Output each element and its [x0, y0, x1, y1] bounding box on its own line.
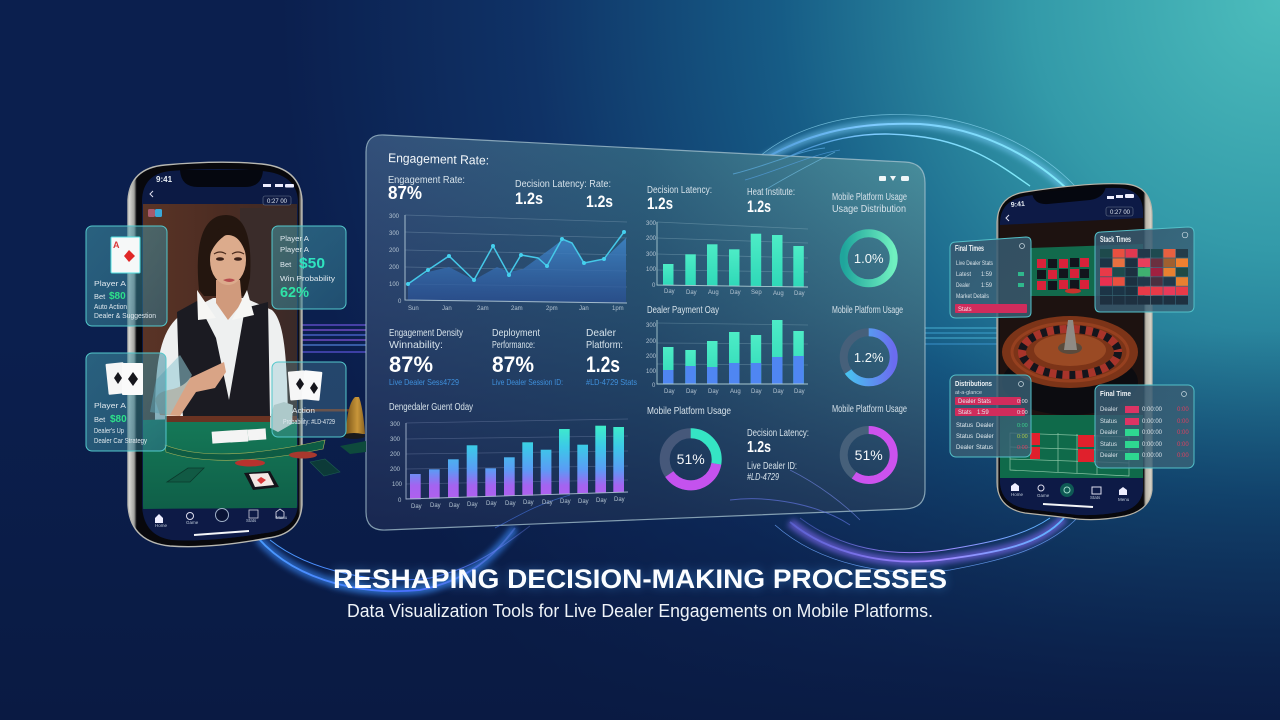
KPI: heat institute — [747, 187, 795, 216]
neon data streaks right — [925, 328, 998, 344]
floating table: final times 1: Market Details — [956, 294, 989, 300]
gradient bar chart: Day — [578, 499, 589, 505]
floating table: final times 3: 0:00:00 — [1142, 419, 1163, 425]
floating card: player A lower left: Bet — [94, 415, 106, 424]
KPI: decision latency 2 — [647, 185, 712, 213]
floating card: win probability: Player A — [280, 245, 309, 254]
floating table: final times 3 — [1095, 385, 1194, 468]
nav bar: Stats — [1090, 495, 1101, 500]
bar chart: latency: 300 — [646, 221, 657, 227]
line chart: engagement: 200 — [389, 265, 400, 271]
KPI: deployment performance: Live Dealer Session ID: — [492, 377, 563, 387]
floating table: distribution: at-a-glance — [955, 390, 982, 396]
bar chart: latency: Day — [664, 289, 675, 295]
line chart: engagement: 200 — [389, 248, 400, 254]
floating table: final times 1: Stats — [958, 307, 972, 313]
donut heading: mobile usage: Mobile Platform Usage — [832, 192, 907, 203]
bar chart: latency: 300 — [646, 252, 657, 258]
floating table: distribution: 0:00 — [1017, 434, 1028, 440]
KPI: deployment performance: Deployment — [492, 328, 540, 339]
line chart: engagement: Jan — [579, 306, 589, 312]
screen — [1000, 188, 1143, 515]
floating card: win probability: Player A — [280, 234, 309, 243]
line chart: engagement: 300 — [389, 231, 400, 237]
dealer figure — [150, 215, 288, 420]
floating card: cards and stats — [272, 362, 346, 437]
floating card: player A lower left: Player A — [94, 401, 126, 410]
KPI: engagement density: Engagement Density — [389, 328, 463, 339]
donut: 1.0%: 1.0% — [854, 251, 884, 266]
bar chart: latency — [646, 221, 808, 297]
left phone: blackjack — [128, 162, 325, 547]
floating table: distribution: 0:00 — [1017, 423, 1028, 429]
floating card: player A top left — [86, 226, 167, 326]
line chart: engagement: 2am — [511, 306, 523, 312]
KPI: engagement rate — [388, 175, 465, 203]
donut heading: platform usage 4: Mobile Platform Usage — [832, 404, 907, 415]
floating table: distribution: 1:59 — [977, 410, 989, 416]
floating table: distribution — [950, 375, 1031, 457]
KPI: engagement density: Winnability: — [389, 340, 443, 351]
floating card: player A top left: Player A — [94, 279, 126, 288]
gradient bar chart: Day — [560, 499, 571, 505]
panel heading: Engagement Rate: — [388, 151, 489, 168]
floating table: final times 3: 0:00:00 — [1142, 407, 1163, 413]
nav bar: Home — [1011, 492, 1024, 497]
gradient bar chart: Day — [486, 501, 497, 507]
stacked bar chart: Day — [773, 389, 784, 395]
gradient bar chart: 100 — [392, 482, 403, 488]
nav bar: Game — [186, 520, 199, 525]
floating table: final times 3: Status — [1100, 419, 1117, 425]
floating table: distribution: Dealer — [976, 434, 994, 440]
back arrow and chip — [150, 191, 291, 205]
status bar — [156, 175, 294, 188]
stacked bar chart: 200 — [646, 354, 657, 360]
backdrop window — [240, 208, 297, 308]
floating table: final times 3: Status — [1100, 442, 1117, 448]
floating card: win probability — [272, 226, 346, 309]
phone frame — [128, 162, 302, 547]
floating table: final times 3: Final Time — [1100, 389, 1131, 398]
chart heading: dealer event: Dengedaler Guent Oday — [389, 402, 473, 413]
main title: RESHAPING DECISION-MAKING PROCESSES — [333, 564, 947, 594]
mini badges — [148, 209, 162, 217]
bar chart: latency: 100 — [646, 267, 657, 273]
stacked bar chart: 300 — [646, 323, 657, 329]
stacked bar chart: 100 — [646, 369, 657, 375]
KPI: deployment performance: Performance: — [492, 340, 535, 351]
floating table: final times 3: 0:00 — [1177, 453, 1189, 459]
nav bar: Game — [1037, 493, 1050, 498]
notch — [1032, 186, 1106, 204]
floating table: final times 1: 1:59 — [981, 283, 993, 289]
donut: 1.0% — [844, 233, 894, 283]
KPI: dealer platform: Dealer — [586, 328, 617, 339]
main title: RESHAPING DECISION-MAKING PROCESSES — [333, 564, 947, 594]
gradient bar chart: Day — [542, 500, 553, 506]
gradient bar chart: 200 — [390, 467, 401, 473]
KPI: engagement density: Live Dealer Sess4729 — [389, 377, 459, 387]
floating table: distribution: Distributions — [955, 379, 992, 388]
line chart: engagement: 2pm — [546, 306, 558, 312]
neon data streaks left — [302, 325, 366, 352]
back arrow and chip: 0:27 00 — [267, 199, 288, 205]
nav bar: Menu — [276, 515, 288, 520]
floating card: player A lower left: Dealer's Up — [94, 426, 124, 435]
KPI: decision latency and dealer ID — [747, 428, 809, 483]
bar chart: latency: 0 — [652, 283, 656, 289]
floating card: player A lower left: $80 — [110, 414, 127, 425]
KPI: decision latency 2: Decision Latency: — [647, 185, 712, 196]
floating table: final times 3: 0:00:00 — [1142, 453, 1163, 459]
donut: 51% teal and magenta: 51% — [677, 451, 705, 467]
bar chart: latency: Sep — [751, 290, 762, 296]
gradient bar chart: Day — [411, 504, 422, 510]
KPI: decision latency: Decision Latency: Rate: — [515, 179, 611, 190]
nav bar — [1000, 478, 1143, 515]
roulette layout — [1030, 244, 1143, 296]
gradient bar chart: 0 — [398, 498, 402, 504]
donut heading: mobile usage: Usage Distribution — [832, 204, 906, 215]
subtitle: Data Visualization Tools for Live Dealer Engagements on Mobile Platforms. — [347, 601, 933, 621]
floating table: final times 1: Latest — [956, 272, 971, 278]
KPI: engagement rate: Engagement Rate: — [388, 175, 465, 186]
floating table: distribution: Dealer — [956, 445, 974, 451]
line chart: engagement: 0 — [398, 299, 402, 305]
KPI: decision latency: 1.2s — [586, 192, 613, 211]
nav bar: Stats — [246, 518, 257, 523]
line chart: engagement: Jan — [442, 306, 452, 312]
KPI: heat institute: 1.2s — [747, 197, 771, 216]
floating table: final times 3: Dealer — [1100, 430, 1118, 436]
nav bar — [143, 506, 297, 540]
status bar — [1006, 194, 1134, 221]
gradient bar chart: Day — [430, 503, 441, 509]
donut heading: mobile usage — [832, 192, 907, 215]
main dashboard panel — [366, 135, 925, 530]
status bar: 9:41 — [1011, 201, 1025, 209]
floating table: final times 1: Final Times — [955, 244, 984, 253]
gradient bar chart: 300 — [390, 437, 401, 443]
gradient bar chart: Day — [467, 502, 478, 508]
KPI: decision latency: 1.2s — [515, 189, 543, 208]
KPI: decision latency and dealer ID: Decision Latency: — [747, 428, 809, 439]
phone frame — [997, 184, 1152, 520]
donut: 1.2%: 1.2% — [854, 350, 884, 365]
KPI: decision latency and dealer ID: 1.2s — [747, 439, 771, 456]
KPI: dealer platform: #LD-4729 Stats — [586, 377, 637, 387]
floating card: win probability: Bet — [280, 260, 292, 269]
floating card: win probability: Win Probability — [280, 274, 335, 283]
line chart: engagement: 1pm — [612, 306, 624, 312]
casino backdrop — [143, 204, 297, 420]
roulette wheel — [1002, 316, 1138, 415]
floating card: player A top left: $80 — [109, 291, 126, 302]
floating table: final times 3: 0:00 — [1177, 407, 1189, 413]
donut: 51% teal and magenta — [661, 429, 721, 489]
KPI: deployment performance — [492, 328, 563, 387]
floating heatmap: final times 2 — [1095, 227, 1194, 312]
swirling light trails — [258, 115, 1080, 591]
screen — [142, 169, 298, 540]
KPI: dealer platform: Platform: — [586, 340, 623, 351]
gradient bar chart: Day — [596, 498, 607, 504]
bar chart: latency: Day — [686, 290, 697, 296]
floating table: final times 1: Live Dealer Stats — [956, 261, 993, 267]
gradient bar chart: Day — [614, 497, 625, 503]
floating table: final times 3: 0:00 — [1177, 419, 1189, 425]
stacked bar chart: Day — [751, 389, 762, 395]
chart heading: mobile usage 3: Mobile Platform Usage — [647, 406, 731, 417]
stacked bar chart: Aug — [730, 389, 741, 395]
floating table: distribution: 0:00 — [1017, 445, 1028, 451]
status icons — [879, 176, 909, 181]
stacked bar chart — [646, 320, 808, 395]
floating table: final times 1 — [950, 237, 1031, 318]
donut: 1.2% — [844, 332, 894, 382]
KPI: deployment performance: 87% — [492, 352, 534, 377]
floating card: player A top left: Auto Action — [94, 302, 127, 311]
KPI: heat institute: Heat Institute: — [747, 187, 795, 198]
swirl traces seen through the glass — [495, 148, 860, 528]
nav bar: Menu — [1118, 497, 1130, 502]
floating table: final times 3: Dealer — [1100, 453, 1118, 459]
stacked bar chart: 200 — [646, 339, 657, 345]
floating card: player A top left: Bet — [94, 292, 106, 301]
donut heading: platform usage 2: Mobile Platform Usage — [832, 305, 903, 316]
chart heading: dealer payment: Dealer Payment Oay — [647, 305, 719, 316]
stacked bar chart: Day — [794, 389, 805, 395]
floating card: win probability: 62% — [280, 284, 309, 301]
nav bar: Home — [155, 523, 168, 528]
floating table: distribution: 0:00 — [1017, 399, 1028, 405]
KPI: dealer platform — [586, 328, 637, 387]
floating card: player A top left: Dealer & Suggestion — [94, 311, 156, 320]
line chart: engagement: 2am — [477, 306, 489, 312]
status bar: 0:27 00 — [1110, 210, 1131, 216]
gradient bar chart — [390, 419, 628, 510]
floating table: final times 3: 0:00:00 — [1142, 442, 1163, 448]
KPI: decision latency 2: 1.2s — [647, 194, 673, 213]
notch — [180, 170, 263, 187]
KPI: engagement rate: 87% — [388, 183, 422, 203]
donut: 51% magenta — [844, 430, 894, 480]
bar chart: latency: Day — [730, 290, 741, 296]
betting grid — [1000, 415, 1143, 478]
KPI: decision latency — [515, 179, 613, 211]
floating table: final times 3: 0:00:00 — [1142, 430, 1163, 436]
gradient bar chart: 200 — [390, 452, 401, 458]
floating table: distribution: 0:00 — [1017, 410, 1028, 416]
floating table: distribution: Status — [956, 434, 973, 440]
blackjack table — [143, 402, 325, 509]
KPI: engagement density: 87% — [389, 352, 433, 377]
gradient bar chart: Day — [523, 500, 534, 506]
donut: 51% magenta: 51% — [855, 447, 883, 463]
gradient bar chart: Day — [505, 501, 516, 507]
bar chart: latency: Aug — [773, 291, 784, 297]
floating table: final times 3: Dealer — [1100, 407, 1118, 413]
stacked bar chart: Day — [686, 389, 697, 395]
stacked bar chart: 0 — [652, 383, 656, 389]
status bar: 9:41 — [156, 175, 173, 184]
line chart: engagement: 300 — [389, 214, 400, 220]
floating table: final times 3: 0:00 — [1177, 430, 1189, 436]
floating card: player A lower left — [86, 353, 166, 451]
floating card: cards and stats: Probability: #LD-4729 — [283, 417, 335, 426]
gradient bar chart: 300 — [390, 422, 401, 428]
floating card: cards and stats: Action — [292, 406, 315, 415]
floating heatmap: final times 2: Stack Times — [1100, 235, 1131, 244]
line chart: engagement: 100 — [389, 282, 400, 288]
bar chart: latency: 200 — [646, 236, 657, 242]
stacked bar chart: Day — [664, 389, 675, 395]
right phone: roulette — [997, 184, 1152, 520]
floating table: distribution: Dealer — [976, 423, 994, 429]
KPI: decision latency and dealer ID: #LD-4729 — [747, 472, 779, 483]
line chart: engagement — [389, 214, 627, 312]
stacked bar chart: Day — [708, 389, 719, 395]
KPI: dealer platform: 1.2s — [586, 352, 620, 377]
KPI: engagement density — [389, 328, 463, 387]
floating table: distribution: Status — [976, 445, 993, 451]
KPI: decision latency and dealer ID: Live Dealer ID: — [747, 461, 797, 472]
floating table: final times 3: 0:00 — [1177, 442, 1189, 448]
floating table: distribution: Stats — [958, 410, 972, 416]
bar chart: latency: Aug — [708, 290, 719, 296]
floating table: final times 1: 1:59 — [981, 272, 993, 278]
floating card: player A lower left: Dealer Car Strategy — [94, 436, 147, 445]
floating table: distribution: Status — [956, 423, 973, 429]
floating table: distribution: Dealer Stats — [958, 399, 991, 405]
floating card: player A top left: A — [113, 240, 120, 250]
floating card: win probability: $50 — [299, 255, 325, 272]
casino backdrop — [1000, 218, 1143, 415]
off-phone table edge and props — [302, 397, 366, 476]
gradient bar chart: Day — [449, 503, 460, 509]
bar chart: latency: Day — [794, 291, 805, 297]
line chart: engagement: Sun — [408, 306, 419, 312]
floating table: final times 1: Dealer — [956, 283, 970, 289]
